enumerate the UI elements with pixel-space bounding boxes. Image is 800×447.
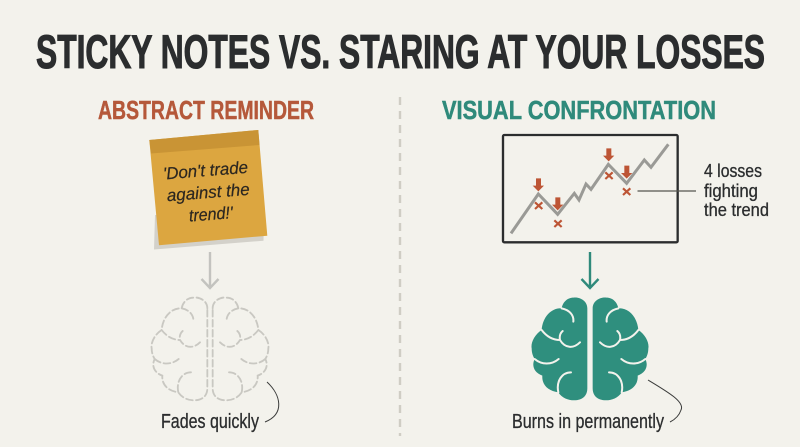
callout text: 4 losses: fighting xyxy=(704,180,758,201)
caption: fades quickly: Fades quickly xyxy=(161,411,259,433)
heading: visual confrontation: VISUAL CONFRONTATION xyxy=(442,95,716,125)
loss markers xyxy=(535,172,630,227)
sticky note xyxy=(149,130,267,250)
callout text: 4 losses: the trend xyxy=(704,199,769,220)
sticky note text xyxy=(162,158,252,227)
icon: solid teal brain xyxy=(531,297,649,400)
icon: faded dashed brain xyxy=(151,297,269,400)
sticky note text: 'Don't trade xyxy=(162,158,249,183)
callout line xyxy=(638,190,696,192)
callout text: 4 losses: 4 losses xyxy=(704,160,762,181)
chart: price line with losses xyxy=(503,135,678,242)
arrow: teal down xyxy=(582,252,598,288)
heading: abstract reminder: ABSTRACT REMINDER xyxy=(98,95,314,125)
sticky note text: against the xyxy=(166,180,250,205)
callout curve: burns xyxy=(648,380,682,422)
callout text: 4 losses xyxy=(704,160,769,220)
callout curve: fades xyxy=(265,382,279,422)
arrow: grey down xyxy=(202,252,218,288)
sticky note text: trend!' xyxy=(188,203,234,226)
loss arrows xyxy=(533,148,632,210)
caption: burns in permanently: Burns in permanently xyxy=(512,411,664,433)
